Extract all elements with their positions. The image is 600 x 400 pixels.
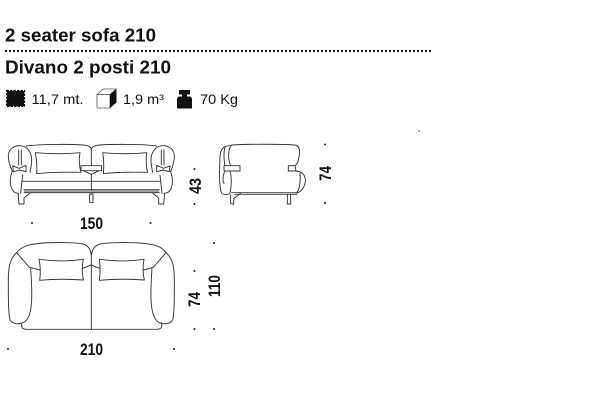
text: volume: 1,9 m³ (123, 91, 164, 107)
dimension: 74 side: 74 (316, 166, 335, 181)
dimension: 110: 110 (205, 275, 224, 297)
dimension: 150: 150 (80, 214, 103, 233)
icon: weight (177, 90, 192, 108)
text: fabric length: 11,7 mt. (32, 91, 84, 107)
icon: volume cube (97, 89, 116, 108)
dimension: 74 top: 74 (185, 292, 204, 307)
title: English: 2 seater sofa 210 (5, 26, 156, 46)
dimension: 210: 210 (80, 340, 103, 359)
drawing: sofa top view (8, 243, 174, 329)
text: weight: 70 Kg (200, 91, 238, 107)
title: Italian: Divano 2 posti 210 (5, 57, 171, 77)
drawing: sofa front view (8, 144, 174, 204)
dimension: 43: 43 (186, 178, 205, 194)
icon: fabric swatch (6, 90, 24, 106)
drawing: sofa side view (220, 144, 305, 204)
dimension marker dots (7, 130, 420, 350)
